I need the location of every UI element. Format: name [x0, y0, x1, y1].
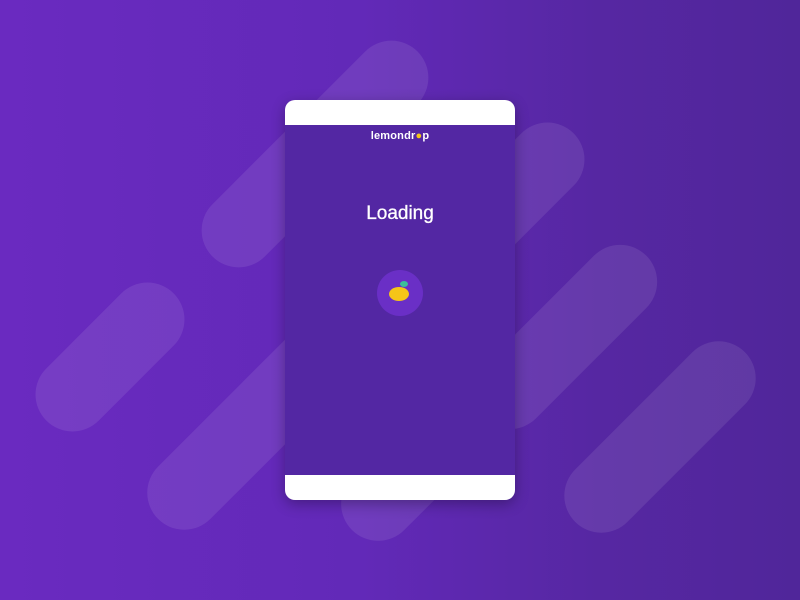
logo: lemondr●p	[371, 130, 429, 142]
heading: Loading: Loading	[366, 203, 434, 224]
icon: lemon	[377, 270, 423, 316]
screen	[285, 125, 515, 475]
phone card	[285, 100, 515, 500]
